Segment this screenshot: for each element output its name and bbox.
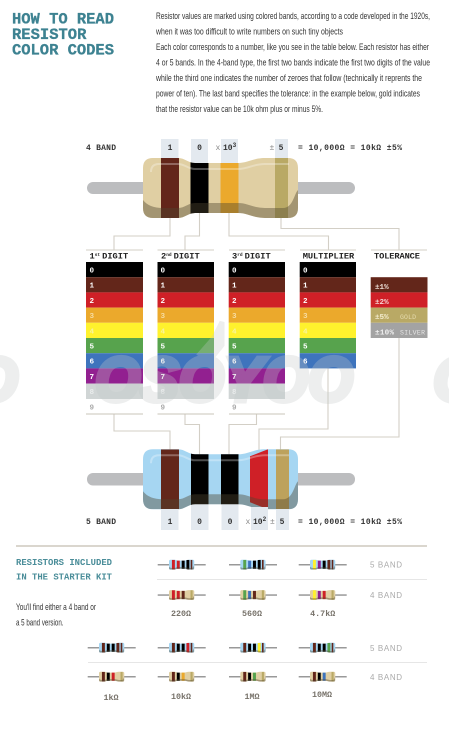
table: 1st digit: 8: [90, 389, 94, 397]
table: multiplier: 6: [303, 359, 308, 367]
table: tolerance: ±1%: [375, 284, 389, 292]
intro text: when it was too difficult to write numbers on such tiny objects: [155, 26, 343, 36]
table: multiplier: 4: [303, 328, 308, 336]
table: 2nd digit: 0: [160, 268, 166, 276]
4 band value labels: 10: [223, 144, 233, 153]
table: 3rd digit: [229, 252, 285, 412]
table: 1st digit: 6: [90, 359, 94, 367]
small resistor: 4.7k 4 band: [299, 590, 347, 600]
row labels: [370, 560, 402, 682]
table: 2nd digit: DIGIT: [174, 252, 200, 262]
4 band value labels: [86, 139, 402, 163]
table: 3rd digit: 1: [232, 283, 237, 291]
table: tolerance: TOLERANCE: [374, 252, 420, 262]
small resistor: 1k 4 band: [88, 672, 136, 682]
5 band value labels: 10: [253, 518, 263, 527]
table: tolerance: ±10%: [375, 330, 394, 338]
table: tolerance: ±2%: [375, 299, 389, 307]
table: 1st digit: 3: [90, 313, 94, 321]
value labels: 1kΩ: [103, 693, 119, 703]
watermark: OSOYOO: [95, 346, 353, 415]
row labels: 5 BAND: [370, 644, 402, 653]
watermark: [0, 322, 449, 415]
small resistor: 1k 5 band: [88, 643, 136, 653]
table: tolerance: GOLD: [400, 314, 416, 321]
intro text: that the resistor value can be 10k ohm plus or minus 5%.: [156, 104, 323, 114]
5 band resistor: [87, 449, 355, 509]
5 band value labels: 5 BAND: [86, 518, 116, 527]
small resistor: 220 5 band: [158, 560, 206, 570]
table: multiplier: 0: [303, 268, 308, 276]
table: 3rd digit: 7: [232, 374, 237, 382]
table: multiplier: MULTIPLIER: [303, 252, 355, 262]
row labels: 5 BAND: [370, 560, 402, 570]
5 band value labels: 0: [197, 518, 202, 527]
4 band value labels: 4 BAND: [86, 144, 116, 153]
table: 2nd digit: 2: [161, 252, 166, 262]
table: multiplier: [300, 252, 356, 368]
table: 2nd digit: 1: [160, 283, 166, 291]
table: multiplier: 5: [303, 344, 308, 352]
table: 3rd digit: 5: [232, 344, 237, 352]
connector lines: [86, 213, 427, 456]
table: tolerance: SILVER: [400, 330, 425, 336]
row labels: 4 BAND: [370, 673, 402, 682]
value labels: 10kΩ: [171, 692, 191, 702]
table: 1st digit: 5: [90, 344, 94, 352]
table: 3rd digit: rd: [237, 252, 243, 258]
table: 2nd digit: [158, 252, 214, 412]
title: [12, 10, 114, 60]
table: 3rd digit: 3: [232, 313, 237, 321]
4 band value labels: ±: [270, 144, 274, 153]
4 band value labels: 3: [233, 142, 237, 149]
table: 1st digit: 7: [90, 374, 94, 382]
table: 3rd digit: DIGIT: [245, 252, 271, 262]
table: 1st digit: st: [95, 252, 100, 258]
table: 3rd digit: 0: [232, 268, 237, 276]
table: 3rd digit: 9: [232, 404, 237, 412]
table: 2nd digit: 8: [160, 389, 166, 397]
4 band value labels: = 10,000Ω = 10kΩ ±5%: [298, 144, 402, 153]
4 band resistor: [87, 158, 355, 218]
5 band value labels: 1: [168, 518, 173, 527]
4 band value labels: 1: [168, 144, 173, 153]
small resistor: 4.7k 5 band: [299, 560, 347, 570]
5 band value labels: ±: [270, 518, 275, 527]
small resistor: 560 5 band: [229, 560, 277, 570]
kit heading: IN THE STARTER KIT: [16, 572, 113, 582]
4 band value labels: 0: [197, 144, 202, 153]
title: COLOR CODES: [12, 42, 114, 60]
table: 3rd digit: 4: [232, 328, 237, 336]
5 band value labels: x: [246, 518, 250, 527]
value labels: 1MΩ: [244, 692, 260, 702]
table: 1st digit: [86, 252, 143, 412]
5 band value labels: = 10,000Ω = 10kΩ ±5%: [298, 518, 402, 527]
5 band value labels: 2: [263, 516, 267, 523]
title: HOW TO READ: [12, 10, 114, 28]
value labels: 220Ω: [171, 609, 191, 619]
table: multiplier: 2: [303, 298, 308, 306]
4 band value labels: 5: [279, 144, 284, 153]
small resistor: 220 4 band: [158, 590, 206, 600]
small resistor: 10M 4 band: [299, 672, 347, 682]
row labels: 4 BAND: [370, 591, 402, 600]
intro text: [155, 11, 430, 114]
table: 2nd digit: 3: [160, 313, 166, 321]
table: 3rd digit: 6: [232, 359, 237, 367]
table: 1st digit: 1: [90, 252, 95, 262]
5 band value labels: [86, 505, 402, 530]
value labels: 10MΩ: [312, 690, 332, 700]
table: tolerance: [371, 252, 428, 338]
kit divider lines: [16, 546, 427, 663]
table: 3rd digit: 8: [232, 389, 237, 397]
kit heading: [16, 558, 113, 582]
table: tolerance: ±5%: [375, 314, 389, 322]
5 band value labels: 5: [280, 518, 285, 527]
table: 2nd digit: 5: [160, 344, 166, 352]
kit text: You'll find either a 4 band or: [16, 602, 96, 612]
table: 2nd digit: 7: [160, 374, 166, 382]
5 band value labels: 0: [228, 518, 233, 527]
value labels: 560Ω: [242, 609, 262, 619]
table: 1st digit: 0: [90, 268, 94, 276]
table: 3rd digit: 3: [232, 252, 237, 262]
table: 1st digit: 4: [90, 328, 94, 336]
value labels: 4.7kΩ: [310, 609, 335, 619]
small resistor: 1M 4 band: [229, 672, 277, 682]
table: 1st digit: DIGIT: [102, 252, 128, 262]
small resistor: 1M 5 band: [229, 643, 277, 653]
table: 1st digit: 9: [90, 404, 94, 412]
kit heading: RESISTORS INCLUDED: [16, 558, 112, 568]
table: 1st digit: 2: [90, 298, 94, 306]
small resistor: 560 4 band: [229, 590, 277, 600]
table: 2nd digit: 2: [160, 298, 166, 306]
table: 2nd digit: nd: [166, 252, 172, 258]
title: RESISTOR: [12, 26, 87, 44]
small resistor: 10k 5 band: [158, 643, 206, 653]
value labels: [103, 609, 335, 703]
table: 2nd digit: 9: [160, 404, 166, 412]
table: 3rd digit: 2: [232, 298, 237, 306]
table: 2nd digit: 6: [160, 359, 166, 367]
small resistor: 10k 4 band: [158, 672, 206, 682]
kit text: [16, 602, 96, 628]
4 band value labels: x: [216, 144, 220, 153]
small resistor: 10M 5 band: [299, 643, 347, 653]
kit text: a 5 band version.: [16, 618, 64, 628]
table: 2nd digit: 4: [160, 328, 166, 336]
table: multiplier: 3: [303, 313, 308, 321]
table: multiplier: 1: [303, 283, 308, 291]
table: 1st digit: 1: [90, 283, 94, 291]
